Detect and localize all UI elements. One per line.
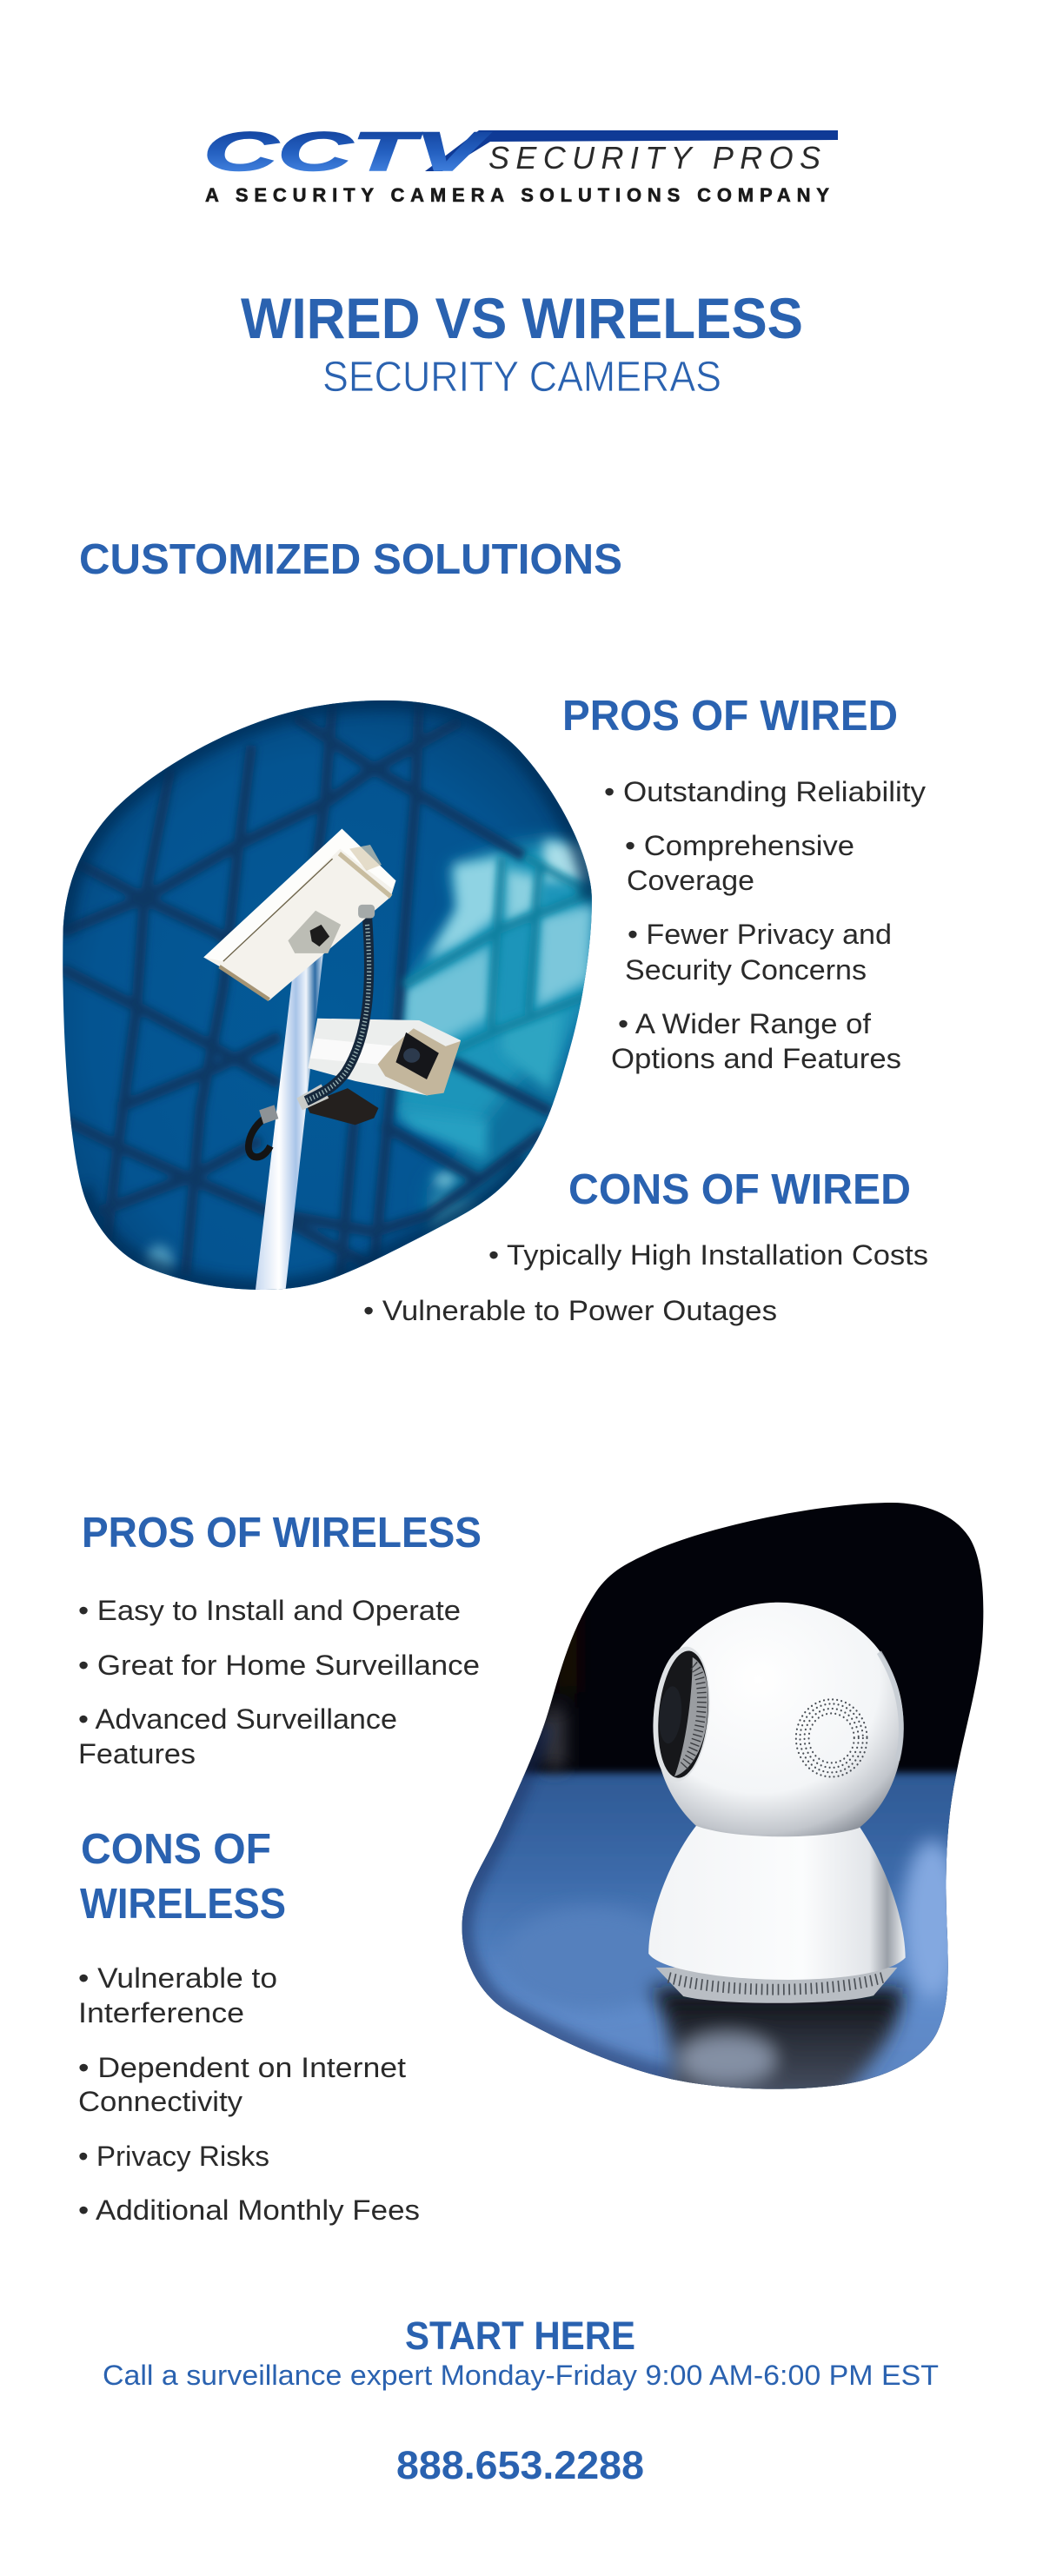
subtitle: SECURITY CAMERAS xyxy=(322,354,721,401)
camera bracket xyxy=(306,1088,378,1125)
heading: cons of wired: CONS OF WIRED xyxy=(568,1166,911,1213)
logo name: SECURITY PROS xyxy=(488,140,820,176)
item: wider range of options: • A Wider Range of xyxy=(618,1008,871,1039)
text: cons of wireless xyxy=(78,1826,420,2226)
edge vignette xyxy=(63,700,592,1290)
logo: CCTV Security Pros xyxy=(203,122,838,206)
camera base xyxy=(656,1968,897,2003)
item: advanced features: • Advanced Surveillance xyxy=(78,1703,397,1735)
heading: cons of wireless xyxy=(80,1826,286,1928)
call to action xyxy=(103,2314,939,2487)
item: outstanding reliability: • Outstanding Reliability xyxy=(604,776,926,807)
blurred window grid xyxy=(61,701,551,1279)
phone number: 888.653.2288 xyxy=(396,2443,644,2487)
item: advanced features: Features xyxy=(78,1738,196,1769)
shadow under camera xyxy=(650,1988,903,2103)
item: internet connectivity: Connectivity xyxy=(78,2086,242,2117)
item: internet connectivity xyxy=(78,2052,406,2117)
logo wordmark: CCTV xyxy=(203,122,491,183)
item: installation costs: • Typically High Installation Costs xyxy=(488,1239,928,1271)
item: power outages: • Vulnerable to Power Outages xyxy=(363,1295,777,1326)
camera lens xyxy=(653,1646,710,1780)
text: pros of wireless xyxy=(78,1510,482,1769)
item: advanced features xyxy=(78,1703,397,1769)
title: WIRED VS WIRELESS xyxy=(241,286,803,350)
item: comprehensive coverage: Coverage xyxy=(627,865,754,896)
heading: pros of wired: PROS OF WIRED xyxy=(562,693,898,740)
item: fewer privacy and security concerns xyxy=(625,919,892,986)
item: interference xyxy=(78,1962,277,2028)
heading: customized solutions: CUSTOMIZED SOLUTIONS xyxy=(79,536,622,583)
item: home surveillance: • Great for Home Surveillance xyxy=(78,1650,480,1681)
heading: pros of wireless: PROS OF WIRELESS xyxy=(82,1510,482,1557)
heading: start here: START HERE xyxy=(405,2314,635,2358)
text: pros of wired xyxy=(562,693,926,1074)
photo: wired cameras on a pole xyxy=(54,689,604,1299)
hours line: Call a surveillance expert Monday-Friday 9:00 AM-6:00 PM EST xyxy=(103,2360,939,2391)
heading: cons of wireless: WIRELESS xyxy=(80,1881,286,1928)
item: monthly fees: • Additional Monthly Fees xyxy=(78,2194,420,2226)
text: cons of wired xyxy=(363,1166,928,1326)
heading: cons of wireless: CONS OF xyxy=(81,1826,271,1873)
item: wider range of options xyxy=(611,1008,901,1074)
black cable loop xyxy=(249,1116,270,1157)
item: interference: Interference xyxy=(78,1997,244,2028)
item: comprehensive coverage: • Comprehensive xyxy=(625,830,854,861)
pole xyxy=(256,948,323,1291)
item: fewer privacy and security concerns: • Fewer Privacy and xyxy=(628,919,892,950)
upper camera xyxy=(203,829,395,1000)
camera body xyxy=(648,1826,906,1980)
item: wider range of options: Options and Features xyxy=(611,1043,901,1074)
item: interference: • Vulnerable to xyxy=(78,1962,277,1994)
item: privacy risks: • Privacy Risks xyxy=(78,2141,269,2172)
lower camera xyxy=(308,1019,461,1095)
conduit cable xyxy=(306,917,369,1101)
item: fewer privacy and security concerns: Security Concerns xyxy=(625,954,867,986)
edge vignette xyxy=(462,1724,673,2079)
speaker dots xyxy=(796,1699,867,1776)
camera head xyxy=(654,1603,904,1836)
item: easy to install: • Easy to Install and Operate xyxy=(78,1595,461,1626)
logo tagline: A SECURITY CAMERA SOLUTIONS COMPANY xyxy=(205,184,829,206)
item: comprehensive coverage xyxy=(625,830,854,896)
item: internet connectivity: • Dependent on Internet xyxy=(78,2052,406,2083)
photo: white wireless dome camera xyxy=(462,1503,984,2089)
logo bar xyxy=(425,130,838,171)
